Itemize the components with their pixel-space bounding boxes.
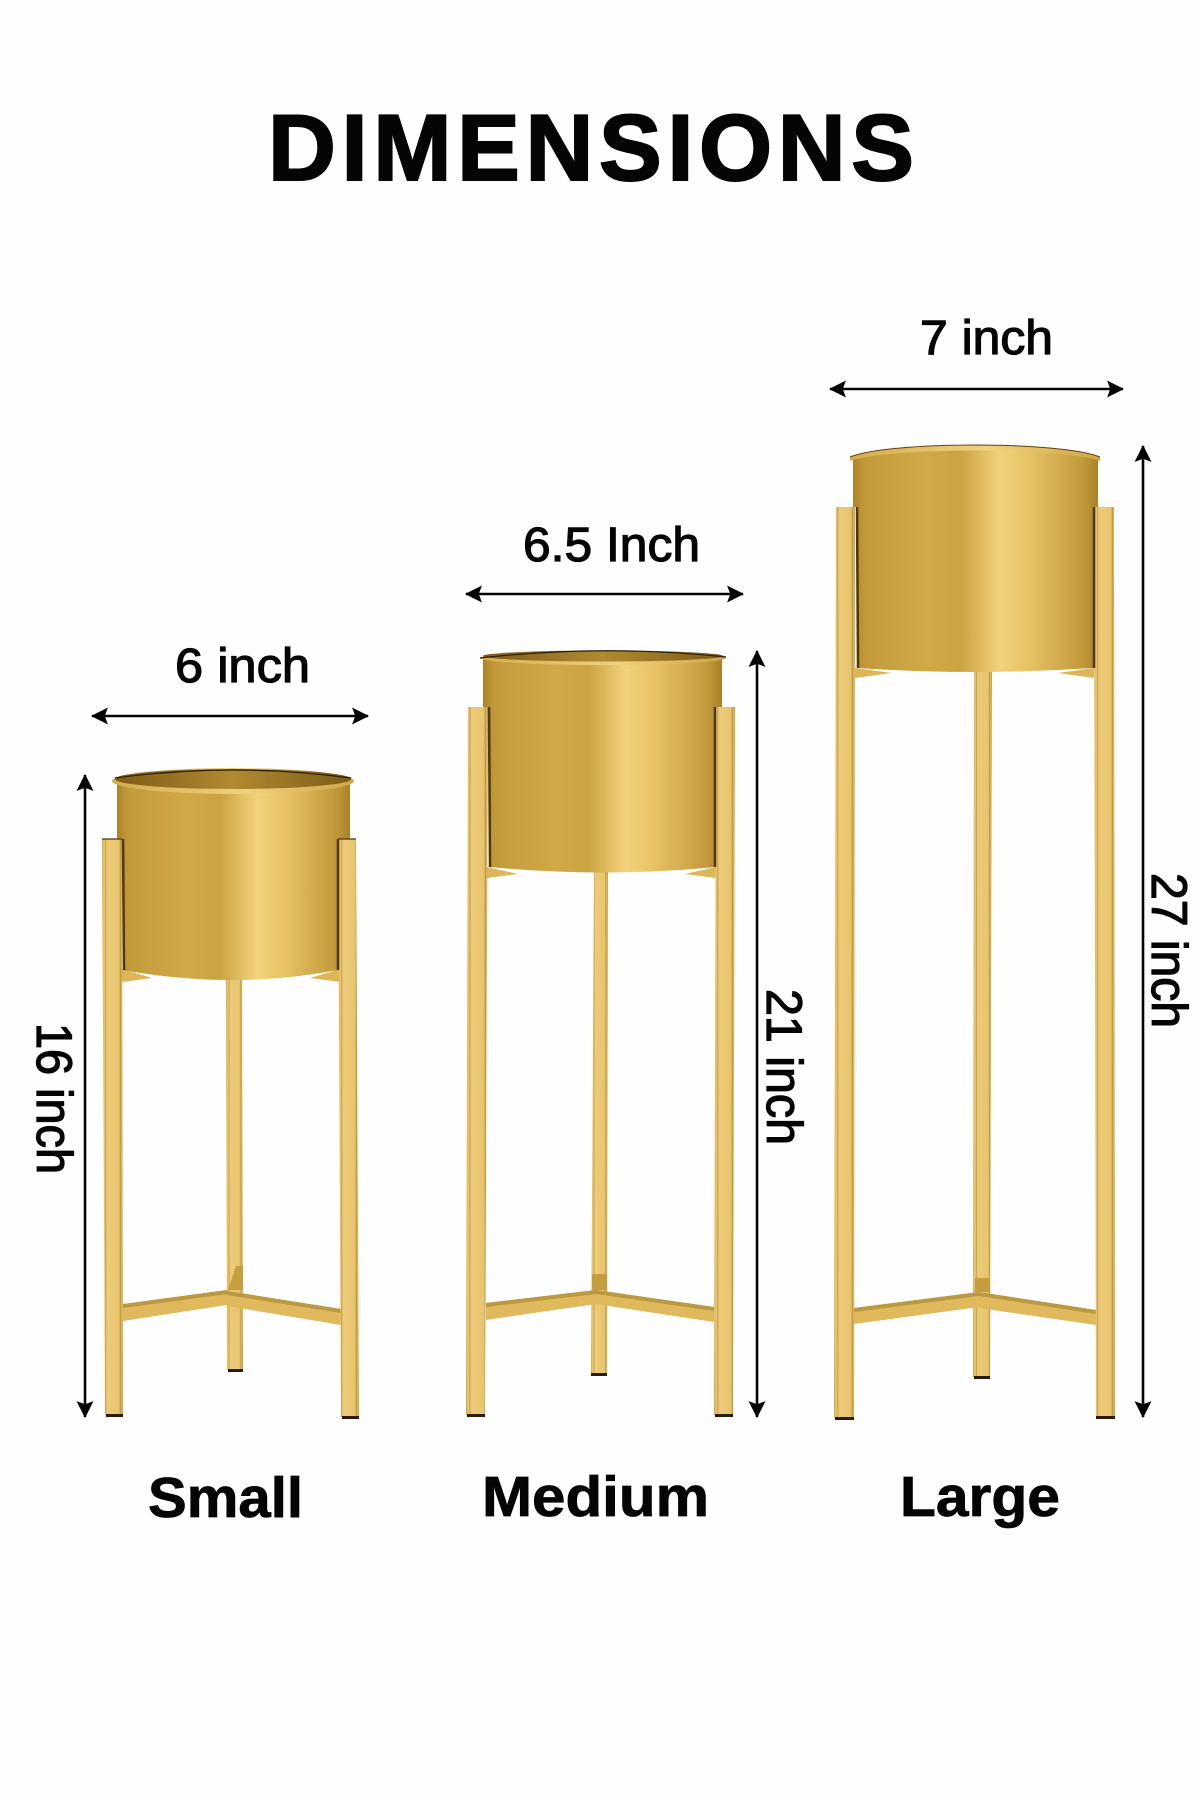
title: DIMENSIONS xyxy=(268,95,914,200)
width label: 6.5 Inch: 6.5 Inch xyxy=(523,519,700,572)
panel: small planter xyxy=(26,640,368,1530)
width label: 7 inch: 7 inch xyxy=(920,312,1053,365)
pot: large xyxy=(850,445,1100,672)
stand: large xyxy=(834,507,1115,1420)
pot: medium xyxy=(480,650,726,872)
height label: 27 inch: 27 inch xyxy=(1141,873,1197,1028)
stand: medium xyxy=(466,707,735,1417)
pot: small xyxy=(102,768,356,980)
height label: 16 inch: 16 inch xyxy=(26,1023,82,1174)
width label: 6 inch: 6 inch xyxy=(175,640,310,693)
height arrow: large xyxy=(1142,446,1144,1417)
height label: 21 inch: 21 inch xyxy=(756,989,812,1145)
stand: small xyxy=(102,839,359,1419)
name: Small: Small xyxy=(148,1466,303,1530)
width arrow: large xyxy=(830,388,1123,390)
height arrow: small xyxy=(84,775,86,1417)
width arrow: small xyxy=(92,715,368,717)
name: Large: Large xyxy=(900,1465,1060,1529)
panel: medium planter xyxy=(466,519,812,1529)
height arrow: medium xyxy=(756,651,758,1417)
width arrow: medium xyxy=(466,593,743,595)
panel: large planter xyxy=(830,312,1197,1529)
name: Medium: Medium xyxy=(482,1465,709,1529)
